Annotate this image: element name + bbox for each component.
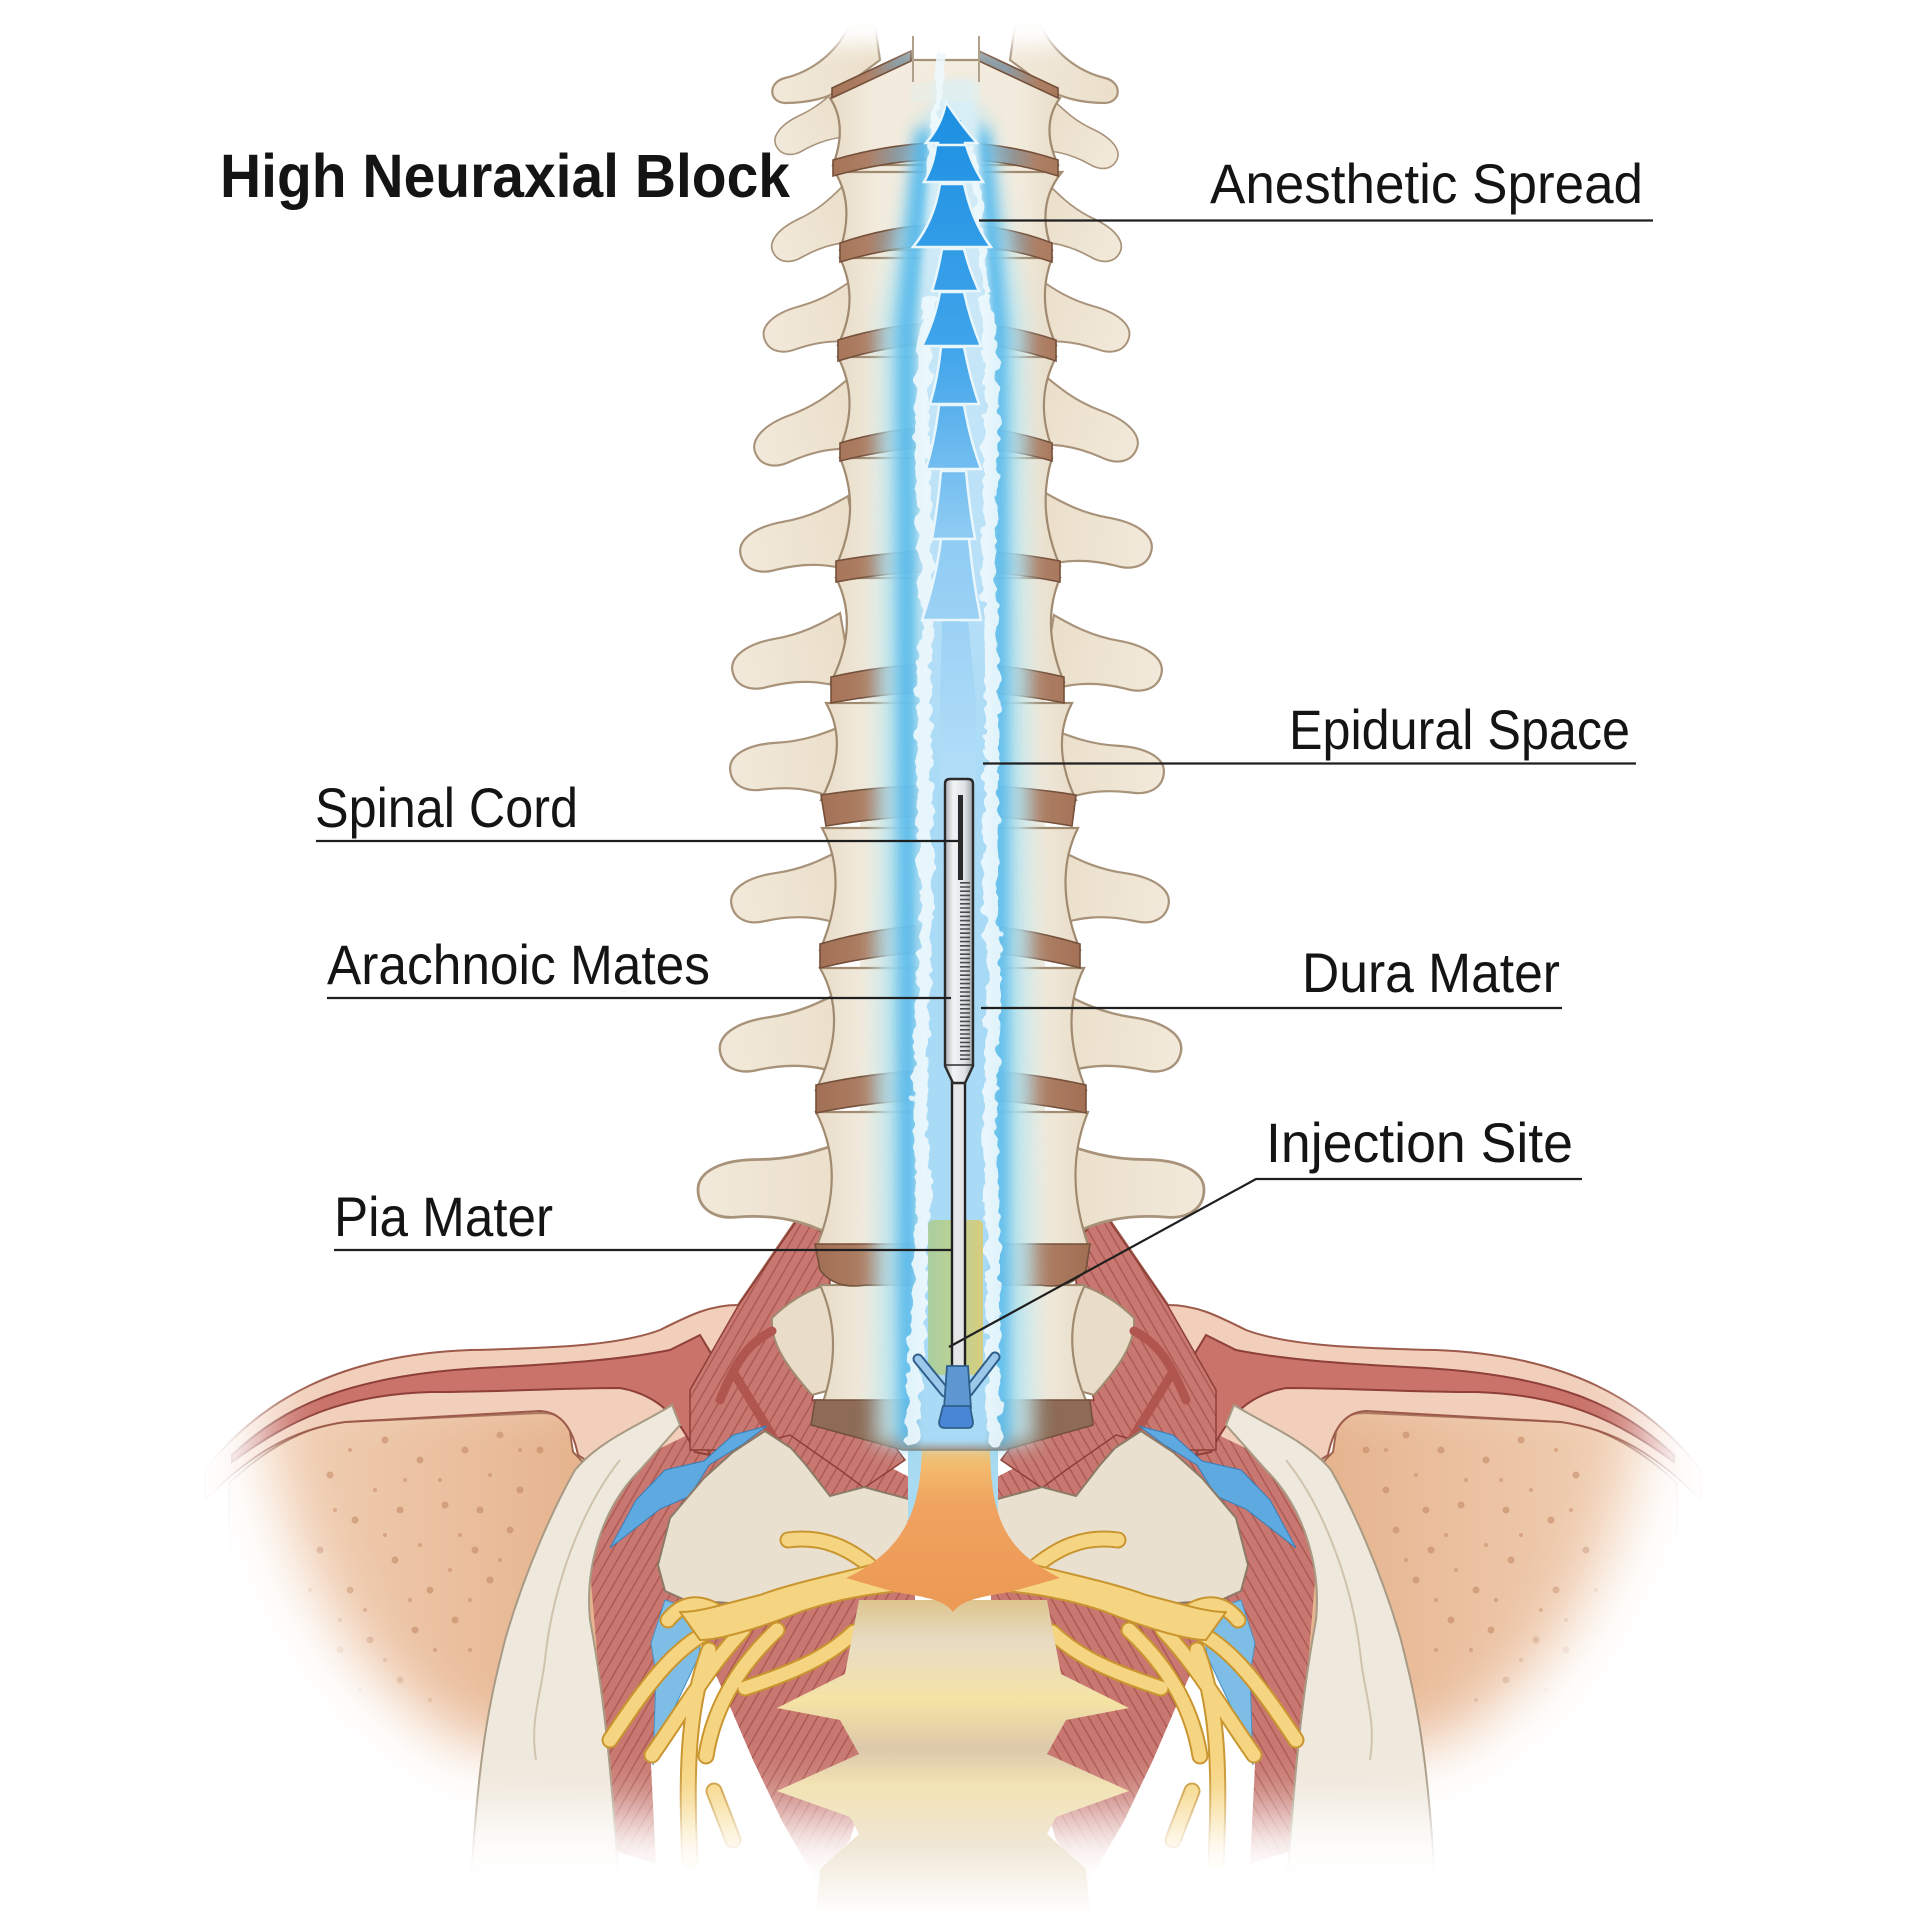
label: Spinal Cord: Spinal Cord xyxy=(315,776,578,839)
hub xyxy=(939,1366,973,1428)
red muscle band xyxy=(232,1335,715,1462)
lower vertebral stack xyxy=(777,1600,1129,1915)
muscles, fascia and vessels xyxy=(205,1210,915,1900)
cream vertebral flare xyxy=(772,1285,845,1395)
barrel graduations xyxy=(945,795,973,1065)
blue strips beside fan xyxy=(908,1440,998,1565)
red muscle wedge beside spine xyxy=(690,1212,905,1488)
right half of torso (mirror) xyxy=(991,1210,1701,1900)
label: Arachnoic Mates: Arachnoic Mates xyxy=(327,933,710,996)
blue vessel lower xyxy=(651,1600,704,1765)
pale shoulder band xyxy=(205,1210,830,1500)
needle barrel xyxy=(945,779,973,1083)
tendons xyxy=(720,1331,801,1483)
cervical canal top xyxy=(911,36,981,102)
label: Epidural Space: Epidural Space xyxy=(1289,698,1630,761)
leader lines xyxy=(316,220,1653,1347)
upward arrow stack xyxy=(913,102,991,790)
transverse processes right xyxy=(1010,25,1204,1242)
vertebral bodies xyxy=(815,60,1090,1415)
subcutaneous tissue with speckles xyxy=(229,1413,620,1800)
transverse processes left xyxy=(698,25,880,1242)
illustration: lower torso anatomy xyxy=(205,1210,1701,1915)
bubbly fluid left and right xyxy=(912,55,995,1440)
green sleeve xyxy=(928,1220,983,1375)
label: Injection Site: Injection Site xyxy=(1266,1111,1573,1174)
cream fascia sheet xyxy=(470,1405,680,1900)
label: Pia Mater: Pia Mater xyxy=(334,1185,553,1248)
spine column xyxy=(698,25,1204,1450)
blue vessel upper xyxy=(610,1426,767,1548)
nerve roots xyxy=(610,1539,915,1860)
label: Dura Mater: Dura Mater xyxy=(1302,941,1560,1004)
needle tube xyxy=(952,1080,965,1370)
label: Anesthetic Spread: Anesthetic Spread xyxy=(1210,152,1643,215)
saturated blue side glow xyxy=(906,130,1000,1445)
needle and catheter assembly xyxy=(918,779,995,1428)
title: High Neuraxial Block xyxy=(220,142,790,210)
hub wings xyxy=(918,1357,995,1392)
central pale band xyxy=(918,80,990,1445)
red muscle backing xyxy=(590,1400,915,1880)
iliac bone xyxy=(658,1431,912,1604)
intervertebral discs xyxy=(811,51,1093,1450)
orange nerve fan xyxy=(846,1440,1060,1612)
left half of torso xyxy=(205,1210,915,1900)
pale teal glow xyxy=(875,110,1035,1445)
anesthetic spread channel xyxy=(875,36,1035,1445)
